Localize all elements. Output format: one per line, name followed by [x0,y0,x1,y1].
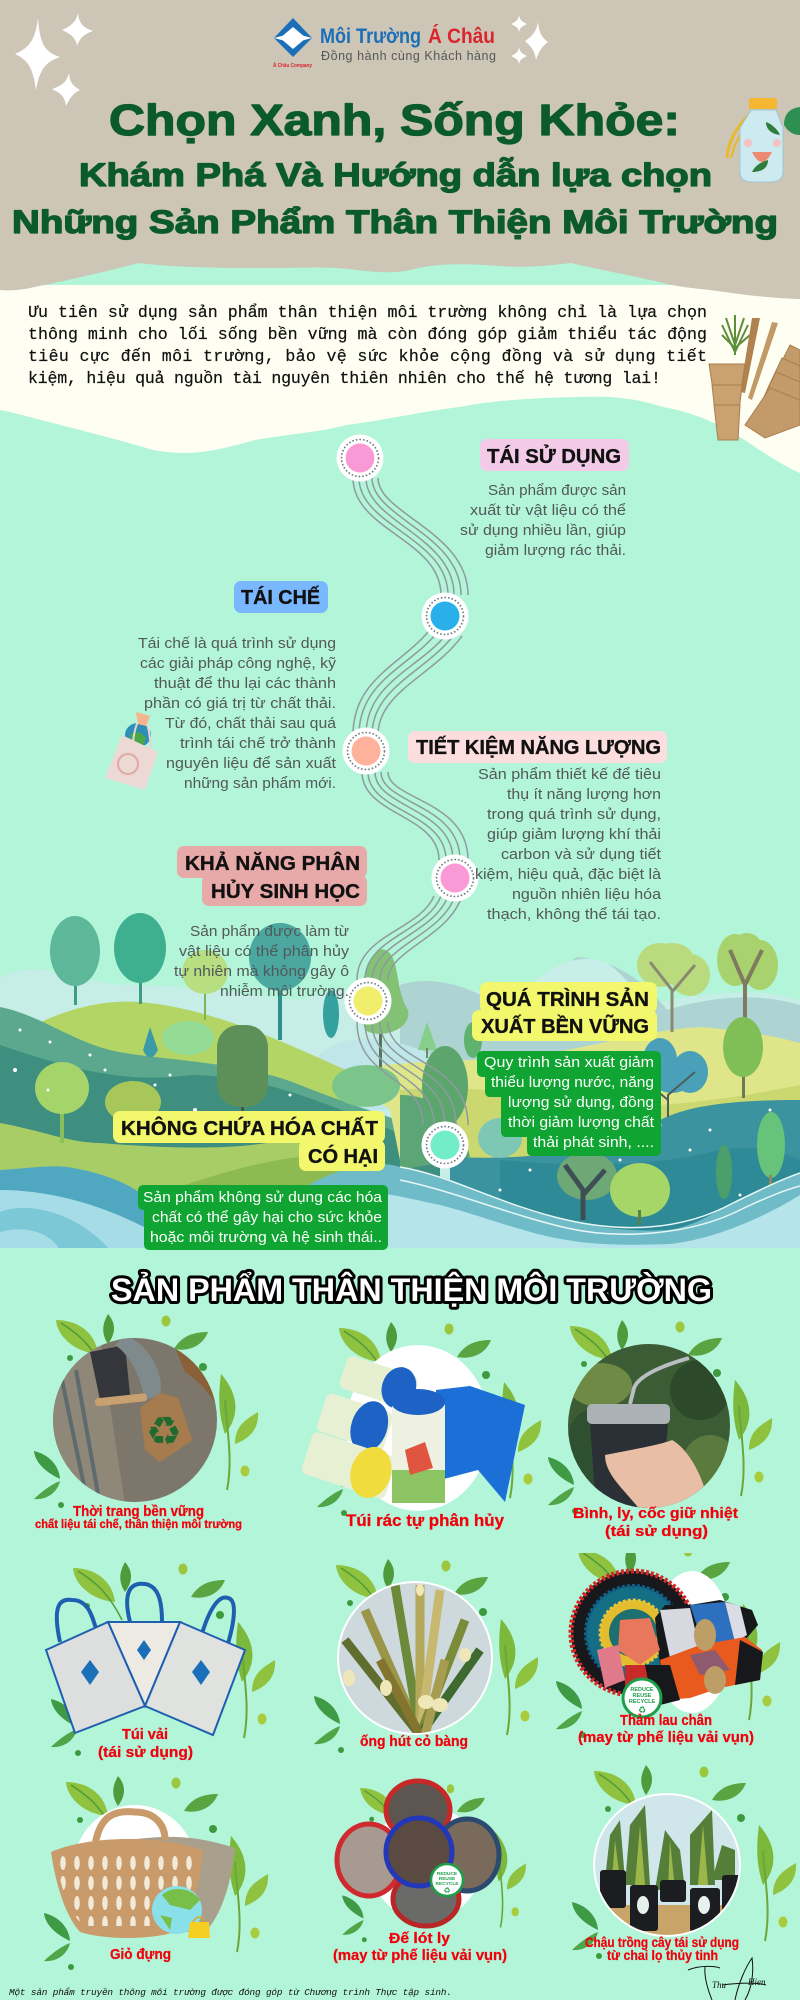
roll lower [660,1637,762,1700]
body text: vật liệu có thể phân hủy [179,943,350,960]
badge: reduce reuse recycle: RECYCLE [629,1699,655,1705]
step marker 5 [344,978,392,1024]
leaves [51,1562,275,1756]
product: insulated tumbler [548,1320,772,1540]
product: sustainable fashion [34,1314,258,1531]
product: biodegradable trash bags [299,1322,541,1530]
badge: reduce reuse recycle: REUSE [633,1693,652,1699]
tag [113,1111,385,1171]
label line 2: (may từ phế liệu vải vụn) [578,1729,754,1746]
body text [460,482,626,559]
tag [177,846,367,906]
panel: Tái sử dụng [460,439,629,559]
intro line 3: tiêu cực đến môi trường, bảo vệ sức khỏe cộng đồng và sử dụng tiết [28,347,707,366]
photo: tan basket [51,1839,203,1938]
road lines connecting the steps [353,478,468,1125]
logo name accent: Á Châu [428,25,495,48]
body text: Sản phẩm thiết kế để tiêu [478,766,661,783]
body text: các giải pháp công nghệ, kỹ [140,655,337,672]
body text: thuật để thu lại các thành [154,675,336,692]
badge: reduce reuse recycle: REUSE [439,1876,456,1882]
intro line 4: kiệm, hiệu quả nguồn tài nguyên thiên nhiên cho thế hệ tương lai! [28,369,661,388]
panel: torn kraft paper header [0,0,800,299]
tag: XUẤT BỀN VỮNG [481,1014,649,1038]
title [12,96,778,240]
tag: TÁI SỬ DỤNG [487,444,621,468]
panel: Tiết kiệm năng lượng [408,731,667,923]
body text [174,923,350,1000]
badge: reduce reuse recycle: RECYCLE [436,1881,459,1887]
badge: reduce reuse recycle: ♻ [638,1706,646,1716]
badge: reduce reuse recycle: REDUCE [437,1871,458,1877]
tag: CÓ HẠI [308,1144,378,1168]
body text: trong quá trình sử dụng, [487,806,661,823]
product: cloth bags [46,1562,275,1761]
intro line 2: thông minh cho lối sống bền vững mà còn đóng góp giảm thiểu tác động [28,325,707,344]
photo: sweater with recycled tag [45,1335,220,1505]
tag: QUÁ TRÌNH SẢN [486,988,649,1011]
green body box: thời giảm lượng chất [508,1114,655,1131]
photo: three bags [46,1622,245,1735]
panel: landscape illustration [0,913,800,1250]
label line 1: Chậu trồng cây tái sử dụng [585,1935,739,1950]
body text [138,635,337,792]
tag [408,731,667,763]
signature: Hien [747,1977,766,1987]
product: basket [44,1776,268,1970]
leaves [34,1314,258,1508]
leaves [556,1544,780,1738]
step marker 2 [422,592,468,640]
body text: thạch, không thể tái tạo. [487,906,661,923]
roll upper [655,1600,758,1665]
panel: Tái chế [105,581,337,792]
body text: Sản phẩm được sản [488,482,626,499]
green body box: hoặc môi trường và hệ sinh thái.. [150,1229,382,1246]
body text: Từ đó, chất thải sau quá [165,715,337,732]
tag [480,439,629,471]
label: Giỏ đựng [110,1946,171,1963]
green body box [477,1051,661,1156]
heading: products section: SẢN PHẨM THÂN THIỆN MÔI TRƯỜNG [111,1272,712,1308]
icon: sparkles left [15,13,93,106]
body text: Tái chế là quá trình sử dụng [138,635,336,652]
body text: carbon và sử dụng tiết [501,846,662,863]
panel: Quá trình sản xuất bền vững [472,982,661,1156]
white backdrop [346,1345,490,1511]
photo: rag rug [571,1571,763,1705]
body text: kiệm, hiệu quả, đặc biệt là [475,866,662,883]
product: doormat [556,1544,780,1746]
green body box: lượng sử dụng, đồng [508,1094,654,1111]
label line 1: Thảm lau chân [620,1712,712,1729]
logo name: Môi Trường [320,25,421,48]
tag [472,982,657,1041]
intro line 1: Ưu tiên sử dụng sản phẩm thân thiện môi trường không chỉ là lựa chọn [28,303,707,322]
label line 2: (may từ phế liệu vải vụn) [333,1947,507,1964]
white backdrop [652,1571,732,1713]
leaves [548,1320,772,1514]
green body box [138,1185,388,1250]
spray dots [13,1028,772,1196]
label line 2: chất liệu tái chế, thân thiện môi trường [35,1519,242,1531]
icon: tote bag with globe [105,712,158,790]
body text: xuất từ vật liệu có thể [470,502,626,519]
icon: yellow recycling bag [188,1917,210,1938]
label line 1: Bình, ly, cốc giữ nhiệt [573,1505,738,1522]
body text: Sản phẩm được làm từ [190,923,349,940]
leaves [317,1322,541,1516]
trees: back row [50,913,778,1120]
photo: coasters [337,1781,499,1926]
badge: reduce reuse recycle: REDUCE [630,1687,654,1693]
photo: grey back basket [130,1837,235,1932]
icon: logo diamond [274,18,312,57]
leaves [572,1765,796,1959]
logo tagline: Đồng hành cùng Khách hàng [321,49,496,63]
green body box: chất có thể gây hại cho sức khỏe [152,1209,382,1226]
photo: tumbler and hand [565,1340,738,1510]
green body box: thiểu lượng nước, năng [491,1074,654,1091]
photo: sweater with recycled tag: ♻ [146,1409,182,1455]
title line 2: Khám Phá Và Hướng dẫn lựa chọn [79,157,712,193]
body text: tự nhiên mà không gây ô [174,963,349,980]
label line 1: Túi vải [122,1726,168,1743]
label line 1: Đế lót ly [389,1930,451,1947]
tag: HỦY SINH HỌC [211,879,360,903]
leaves [44,1776,268,1970]
label line 1: Thời trang bền vững [73,1503,204,1520]
footer note: Một sản phẩm truyền thông môi trường được đóng góp từ Chương trình Thực tập sinh. [9,1987,452,1998]
step marker 1 [336,434,384,482]
tag: TIẾT KIỆM NĂNG LƯỢNG [416,735,661,759]
badge: reduce reuse recycle [431,1864,463,1896]
white backdrop [370,1806,482,1920]
signature [688,1958,766,2000]
water [0,1166,144,1227]
step marker 3 [342,728,390,774]
body text: nguyên liệu để sản xuất [166,755,337,772]
icon: water bottle mascot [727,98,800,182]
body text: nhiễm môi trường. [220,983,349,1000]
green body box: Quy trình sản xuất giảm [484,1054,654,1071]
body text: giúp giảm lượng khí thải [487,826,661,843]
product: reused glass planters [572,1765,796,1963]
body text: sử dụng nhiều lần, giúp [460,522,626,539]
leaves [342,1783,526,1942]
body text [475,766,662,923]
label line 2: (tái sử dụng) [98,1744,193,1761]
tag [234,581,328,613]
green body box: Sản phẩm không sử dụng các hóa [143,1189,383,1206]
badge: reduce reuse recycle: ♻ [443,1886,451,1895]
photo: rolls [299,1350,445,1504]
photo: flat blue bag [436,1386,525,1502]
title line 3: Những Sản Phẩm Thân Thiện Môi Trường [12,204,778,240]
white backdrop [73,1805,197,1935]
intro paragraph [28,303,707,388]
body text: những sản phẩm mới. [184,775,336,792]
title line 1: Chọn Xanh, Sống Khỏe: [109,96,680,145]
body text: nguồn nhiên liệu hóa [512,886,662,903]
tag: KHẢ NĂNG PHÂN [185,851,360,875]
badge: reduce reuse recycle [623,1679,661,1717]
panel: cream intro paper [0,285,800,473]
tag: KHÔNG CHỨA HÓA CHẤT [121,1116,378,1140]
label line 2: (tái sử dụng) [605,1523,708,1540]
leaves [314,1559,538,1753]
label: ống hút cỏ bàng [360,1733,468,1750]
logo company: Á Châu Company [273,62,313,69]
icon: paper cups and straws [709,315,800,440]
tag: TÁI CHẾ [241,586,320,609]
body text: giảm lượng rác thải. [485,542,626,559]
photo: handles [57,1584,234,1650]
photo: bag logos [81,1640,210,1685]
trees: mid row [35,1017,785,1225]
icon: earth mascot [152,1886,202,1934]
product: grass straws [314,1559,538,1753]
icon: sparkles right [511,15,548,64]
logo [273,18,496,69]
label: Túi rác tự phân hủy [346,1511,505,1530]
body text: thụ ít năng lượng hơn [507,786,661,803]
signature: Thu [712,1980,727,1990]
step marker 6 [422,1122,468,1168]
panel: Khả năng phân hủy sinh học [174,846,367,1000]
panel: Không chứa hóa chất có hại [113,1111,388,1250]
product: coasters [333,1781,526,1964]
photo: snake plants in bottles [590,1790,745,1940]
green body box: thải phát sinh, .... [533,1134,654,1151]
photo: straw bundle [335,1580,495,1736]
label line 2: từ chai lọ thủy tinh [607,1948,718,1963]
body text: phần có giá trị từ chất thải. [144,695,336,712]
body text: trình tái chế trở thành [180,735,336,752]
photo: basket handles [95,1812,165,1845]
step marker 4 [432,854,478,902]
